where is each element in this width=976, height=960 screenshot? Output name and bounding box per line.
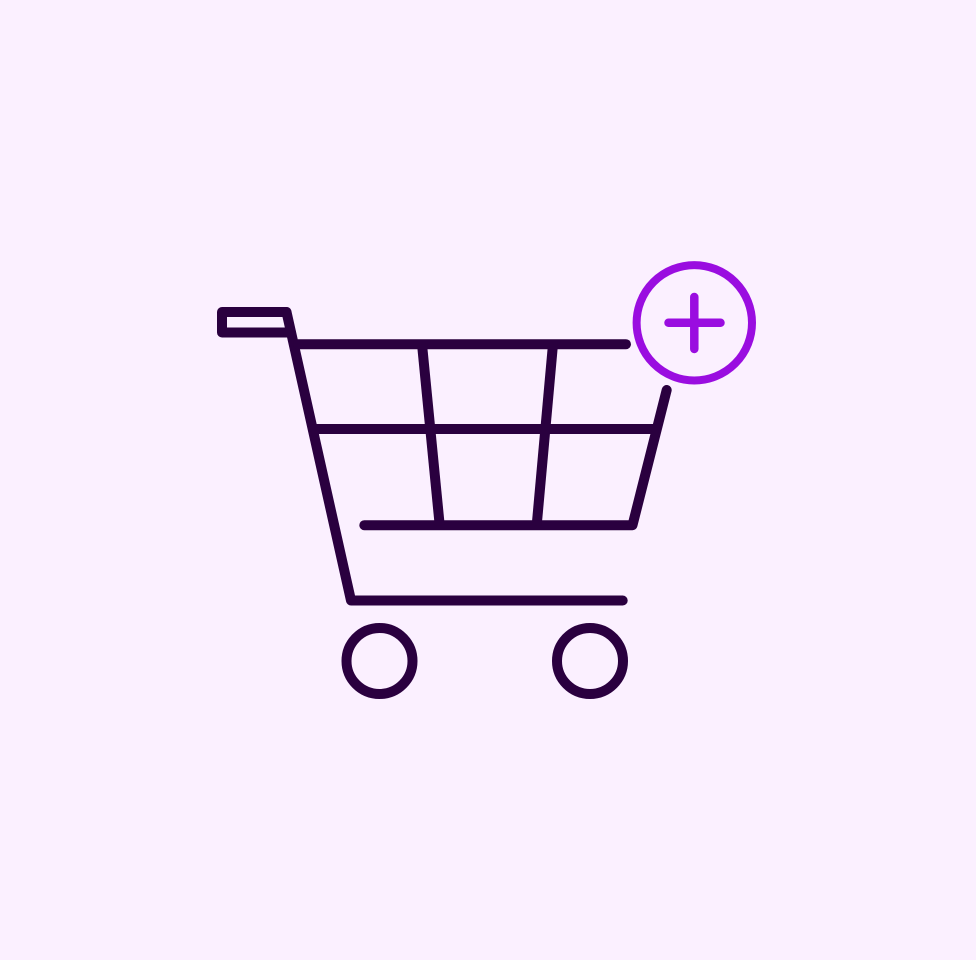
icon: shopping cart xyxy=(222,312,667,694)
badge ring xyxy=(637,265,752,380)
icon: plus badge xyxy=(637,265,752,380)
basket bottom and right side xyxy=(364,390,667,525)
cart handle xyxy=(222,312,291,332)
left vertical wire xyxy=(422,344,440,525)
middle rail xyxy=(315,424,654,434)
plus sign xyxy=(668,297,720,349)
right vertical wire xyxy=(537,344,553,525)
top rail xyxy=(298,339,626,349)
right wheel xyxy=(557,628,623,694)
cart frame xyxy=(286,312,623,600)
left wheel xyxy=(346,628,412,694)
